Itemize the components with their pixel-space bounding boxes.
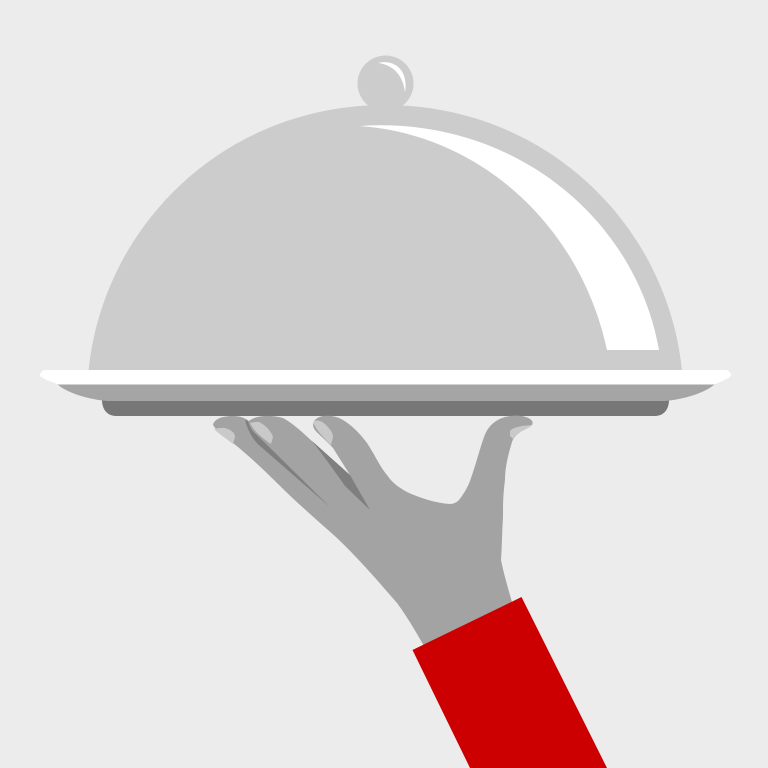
tray base: [102, 400, 669, 416]
cloche dome: [88, 105, 682, 371]
cloche knob: [358, 56, 414, 112]
fingernail: ring finger: [250, 422, 273, 444]
sleeve: [412, 597, 607, 768]
fingernail: little finger: [214, 428, 235, 444]
knob highlight: [378, 62, 406, 92]
icon: hand: [213, 416, 533, 646]
dome highlight: [360, 125, 659, 350]
fingernail: middle finger: [313, 421, 333, 445]
tray top: [40, 370, 731, 384]
hand silhouette: [213, 416, 533, 646]
crease between middle fingers: [312, 441, 370, 510]
icon: cloche: [88, 56, 682, 371]
crease between first fingers: [245, 420, 330, 507]
fingernail: thumb: [510, 425, 532, 439]
tray rim: [57, 384, 715, 401]
icon: tray: [40, 370, 731, 416]
